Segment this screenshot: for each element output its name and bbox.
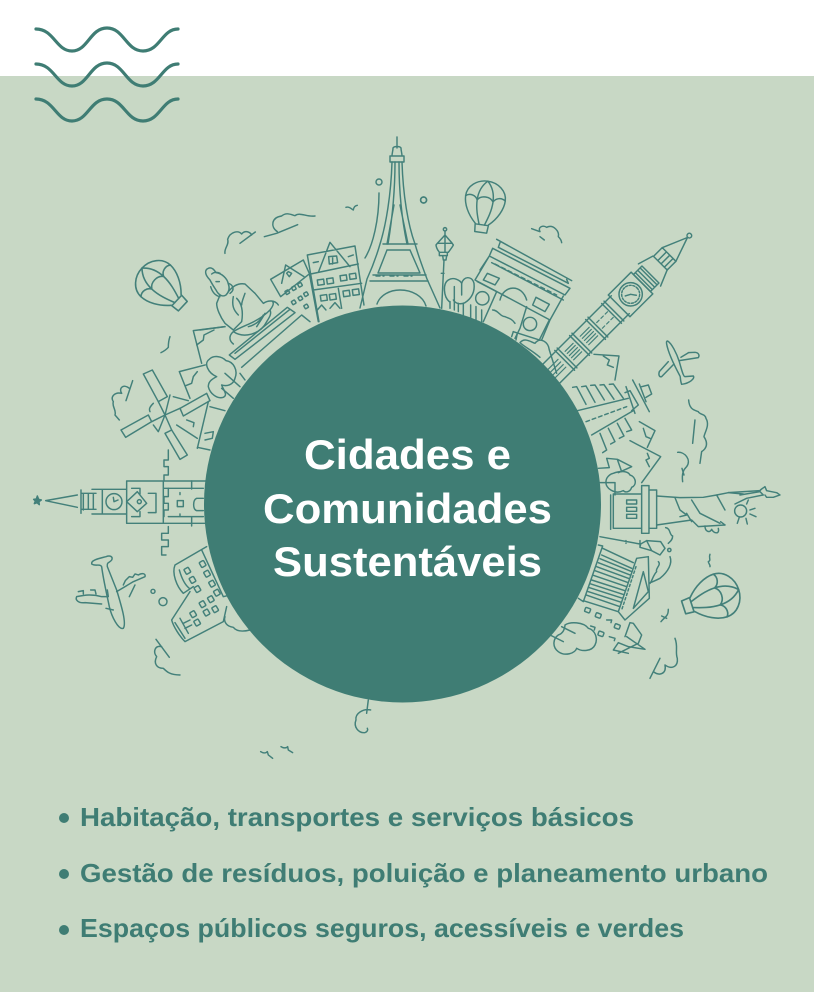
landmark: large gabled house	[307, 242, 364, 322]
title: Comunidades	[263, 485, 552, 532]
icon: clouds right	[678, 400, 707, 482]
icon: clouds and birds upper left	[161, 205, 357, 353]
icon: three waves	[36, 28, 178, 121]
landmark: mountain right	[594, 354, 619, 380]
central teal circle with title	[204, 306, 601, 702]
landmark: left tower with clock	[34, 450, 207, 555]
bullet 3: Espaços públicos seguros, acessíveis e verdes	[80, 913, 684, 943]
landmark: right stepped skyscraper, mountains, house and tree	[573, 380, 661, 495]
icon: cloud and bird lower right	[650, 609, 677, 678]
icon: street lamp	[436, 228, 453, 308]
bullet 1: Habitação, transportes e serviços básicos	[80, 802, 634, 832]
icon: small circles	[151, 589, 167, 606]
bullet 2: Gestão de resíduos, poluição e planeamento urbano	[80, 858, 768, 888]
icon: top hot-air balloon	[461, 178, 508, 235]
landmark: mountains and tree	[179, 327, 245, 398]
landmark: tree beside the arch	[444, 278, 482, 322]
icon: small circle	[421, 197, 427, 203]
bullet list	[59, 802, 768, 943]
landmark: Buddha statue and stairs	[200, 268, 310, 367]
landmark: windmill and cloud	[112, 370, 225, 459]
icon: cloud near Big Ben	[532, 226, 562, 243]
landmark: Big Ben tower	[536, 223, 702, 389]
icon: clouds and birds at the bottom	[155, 639, 371, 758]
icon: right airplane	[659, 341, 699, 384]
landmark: tree at Big Ben base	[520, 340, 557, 373]
icon: right hot-air balloon	[677, 568, 746, 629]
icon: left hot-air balloon	[127, 252, 198, 322]
landmark: colosseum	[172, 547, 250, 642]
icon: left airplane	[76, 556, 145, 628]
icon: cloud and bird right of statue	[666, 528, 710, 567]
title: Cidades e	[304, 431, 511, 478]
landmark: small gabled house	[271, 260, 318, 322]
title: Sustentáveis	[273, 538, 542, 585]
landmark: Eiffel tower	[360, 137, 440, 308]
landmark: Statue of Liberty	[611, 486, 780, 533]
landmark: Greek temple, lamp, windows, house and tree	[550, 537, 671, 654]
illustration: world landmarks around the circle	[34, 137, 780, 758]
title	[263, 431, 552, 585]
landmark: triumphal arch	[475, 239, 572, 340]
